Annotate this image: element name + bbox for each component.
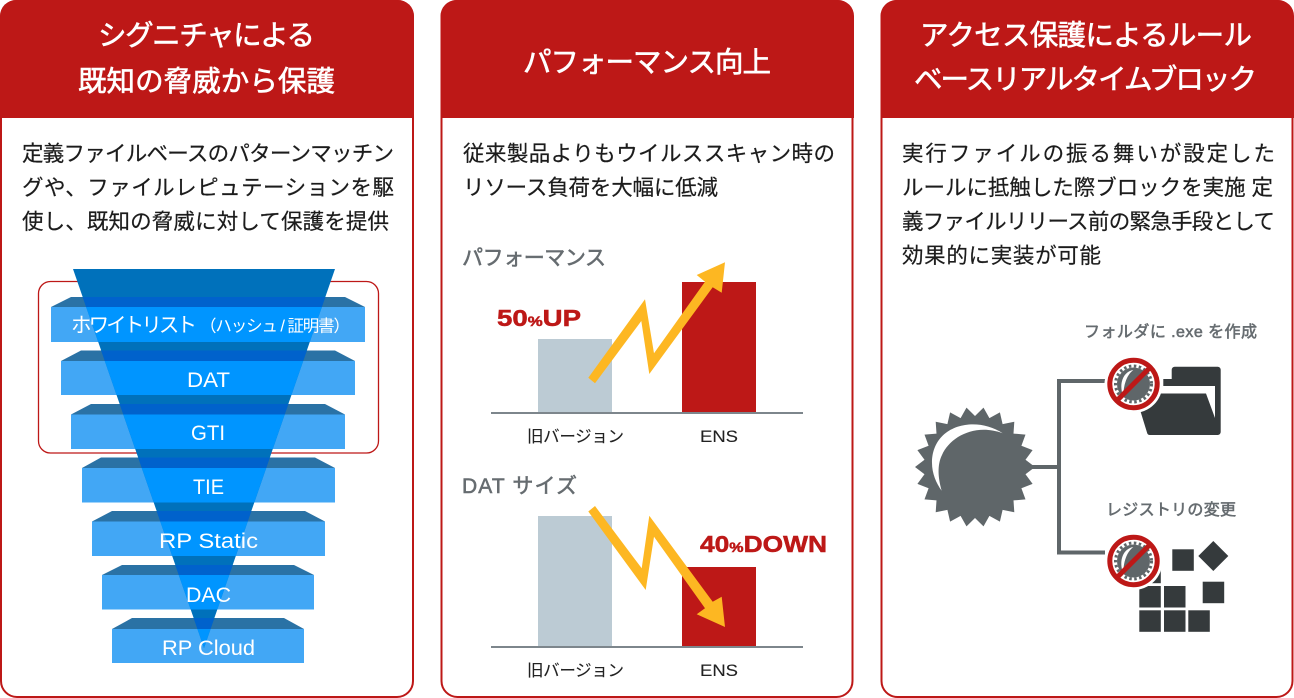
heading: performance: パフォーマンス向上 [523,47,771,79]
body text: access protection: 実行ファイルの振る舞いが設定した [902,142,1275,166]
heading: access protection line 1: アクセス保護によるルール [920,20,1252,52]
chart: performance [462,247,803,446]
bar: ENS [682,282,756,412]
label: create exe in folder: フォルダに .exe を作成 [1084,323,1257,341]
connector lines [1030,381,1105,552]
callout: 40% down: 40 %DOWN [700,531,827,557]
bar: old version [538,516,612,646]
icon: registry blocks [1139,541,1228,632]
body text: access protection: 義ファイルリリース前の緊急手段として [902,210,1275,234]
bar: old version [538,339,612,412]
heading: signature line 1: シグニチャによる [98,20,315,52]
layer label: whitelist: ホワイトリスト [71,314,197,337]
body text: signature: 使し、既知の脅威に対して保護を提供 [22,210,389,234]
bar: ENS [682,567,756,646]
heading: signature line 2: 既知の脅威から保護 [78,66,335,98]
icon: folder [1141,367,1221,435]
axis label: ENS: ENS [700,662,738,680]
chart: DAT size [462,475,827,680]
body text: access protection [902,142,1275,268]
body text: access protection: 効果的に実装が可能 [902,244,1101,268]
body text: signature: 定義ファイルベースのパターンマッチン [22,142,394,166]
panel header: signature [0,0,414,118]
panel: performance [440,0,854,697]
body text: performance [463,142,835,200]
chart title: DAT size: DAT サイズ [462,475,577,498]
label: registry change: レジストリの変更 [1106,501,1236,519]
layer label: RP Static: RP Static [159,530,258,553]
layer label: whitelist [71,314,350,337]
heading: access protection line 2: ベースリアルタイムブロック [914,64,1257,96]
highlight frame [38,282,378,453]
layered funnel diagram [51,269,365,663]
axis label: old version: 旧バージョン [527,428,624,446]
callout: 50% up: 50 %UP [497,305,581,331]
down arrow [588,506,725,627]
panel header: performance [440,0,854,118]
panel: access protection [880,0,1294,697]
icon: gear [915,408,1035,526]
body text: performance: リソース負荷を大幅に低減 [463,176,718,200]
body text: performance: 従来製品よりもウイルススキャン時の [463,142,835,166]
panel header: access protection [880,0,1294,118]
layer label: DAC: DAC [186,584,231,607]
body text: signature: グや、ファイルレピュテーションを駆 [22,176,394,200]
layer label: TIE: TIE [193,476,224,499]
panel: signature protection [0,0,414,697]
layer label: GTI: GTI [191,422,225,445]
chart title: performance: パフォーマンス [462,247,606,270]
body text: signature [22,142,394,234]
icon: blocked gear top [1104,355,1162,413]
axis label: old version: 旧バージョン [527,662,624,680]
layer label: DAT: DAT [187,369,230,392]
axis label: ENS: ENS [700,428,738,446]
layer label: RP Cloud: RP Cloud [162,637,255,660]
body text: access protection: ルールに抵触した際ブロックを実施 定 [902,176,1273,200]
layer label: whitelist: （ハッシュ / 証明書） [200,316,350,336]
icon: blocked gear bottom [1104,532,1162,590]
up arrow [588,262,725,383]
